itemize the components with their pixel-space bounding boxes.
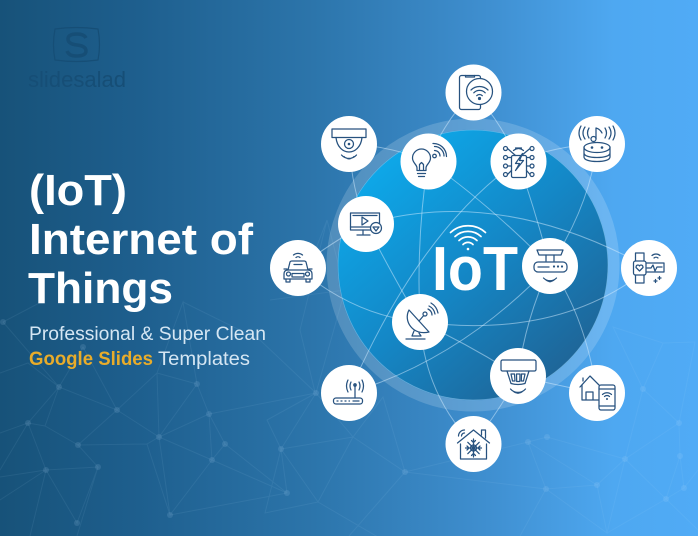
node: wifi router	[321, 365, 377, 421]
node: smart watch	[621, 240, 677, 296]
subtitle: Templates	[158, 349, 250, 370]
icon: TV with play button	[350, 213, 382, 235]
node: smoke detector	[490, 348, 546, 404]
node: smart hub	[522, 238, 578, 294]
title: (IoT)	[29, 166, 127, 215]
node: smart home climate	[446, 416, 502, 472]
title	[28, 166, 253, 313]
title: Internet of	[29, 215, 253, 264]
watermark logo: slidesalad	[28, 28, 126, 92]
node: smart bulb	[400, 134, 456, 190]
icon: ceiling hub	[534, 250, 567, 282]
icon: light bulb with signal	[412, 143, 446, 176]
title: Things	[28, 264, 173, 313]
subtitle: Professional & Super Clean	[29, 324, 266, 345]
globe outer ring	[332, 124, 614, 406]
logo badge	[54, 28, 100, 62]
globe	[338, 130, 608, 400]
node: satellite dish	[392, 294, 448, 350]
node: security camera	[321, 116, 377, 172]
node: smart speaker	[569, 116, 625, 172]
icon: house with snowflake	[458, 430, 490, 459]
icon: house and phone	[580, 376, 615, 410]
background mesh nodes	[0, 319, 687, 526]
icon: dome camera	[332, 129, 366, 159]
subtitle: Google Slides	[29, 349, 153, 370]
node: connected car	[270, 240, 326, 296]
icon: smoke detector	[501, 360, 536, 393]
node: smart TV	[338, 196, 394, 252]
node: smart home with phone	[569, 365, 625, 421]
icon: smartwatch with pulse	[634, 253, 664, 283]
icon: phone with wifi	[460, 76, 492, 110]
icon: circuit phone	[504, 146, 534, 178]
logo wordmark: slidesalad	[28, 67, 126, 92]
node: smart chip	[490, 134, 546, 190]
icon: router	[334, 380, 364, 404]
node: smartphone wifi	[446, 64, 502, 120]
connection lines	[298, 92, 649, 444]
icon: speaker with music note	[579, 126, 615, 162]
icon: car with wifi	[284, 253, 312, 282]
IoT wifi symbol	[450, 226, 486, 250]
IoT centre label: IoT	[432, 235, 518, 304]
icon: satellite dish	[406, 303, 438, 339]
background network mesh	[0, 220, 698, 536]
subtitle	[29, 324, 266, 370]
